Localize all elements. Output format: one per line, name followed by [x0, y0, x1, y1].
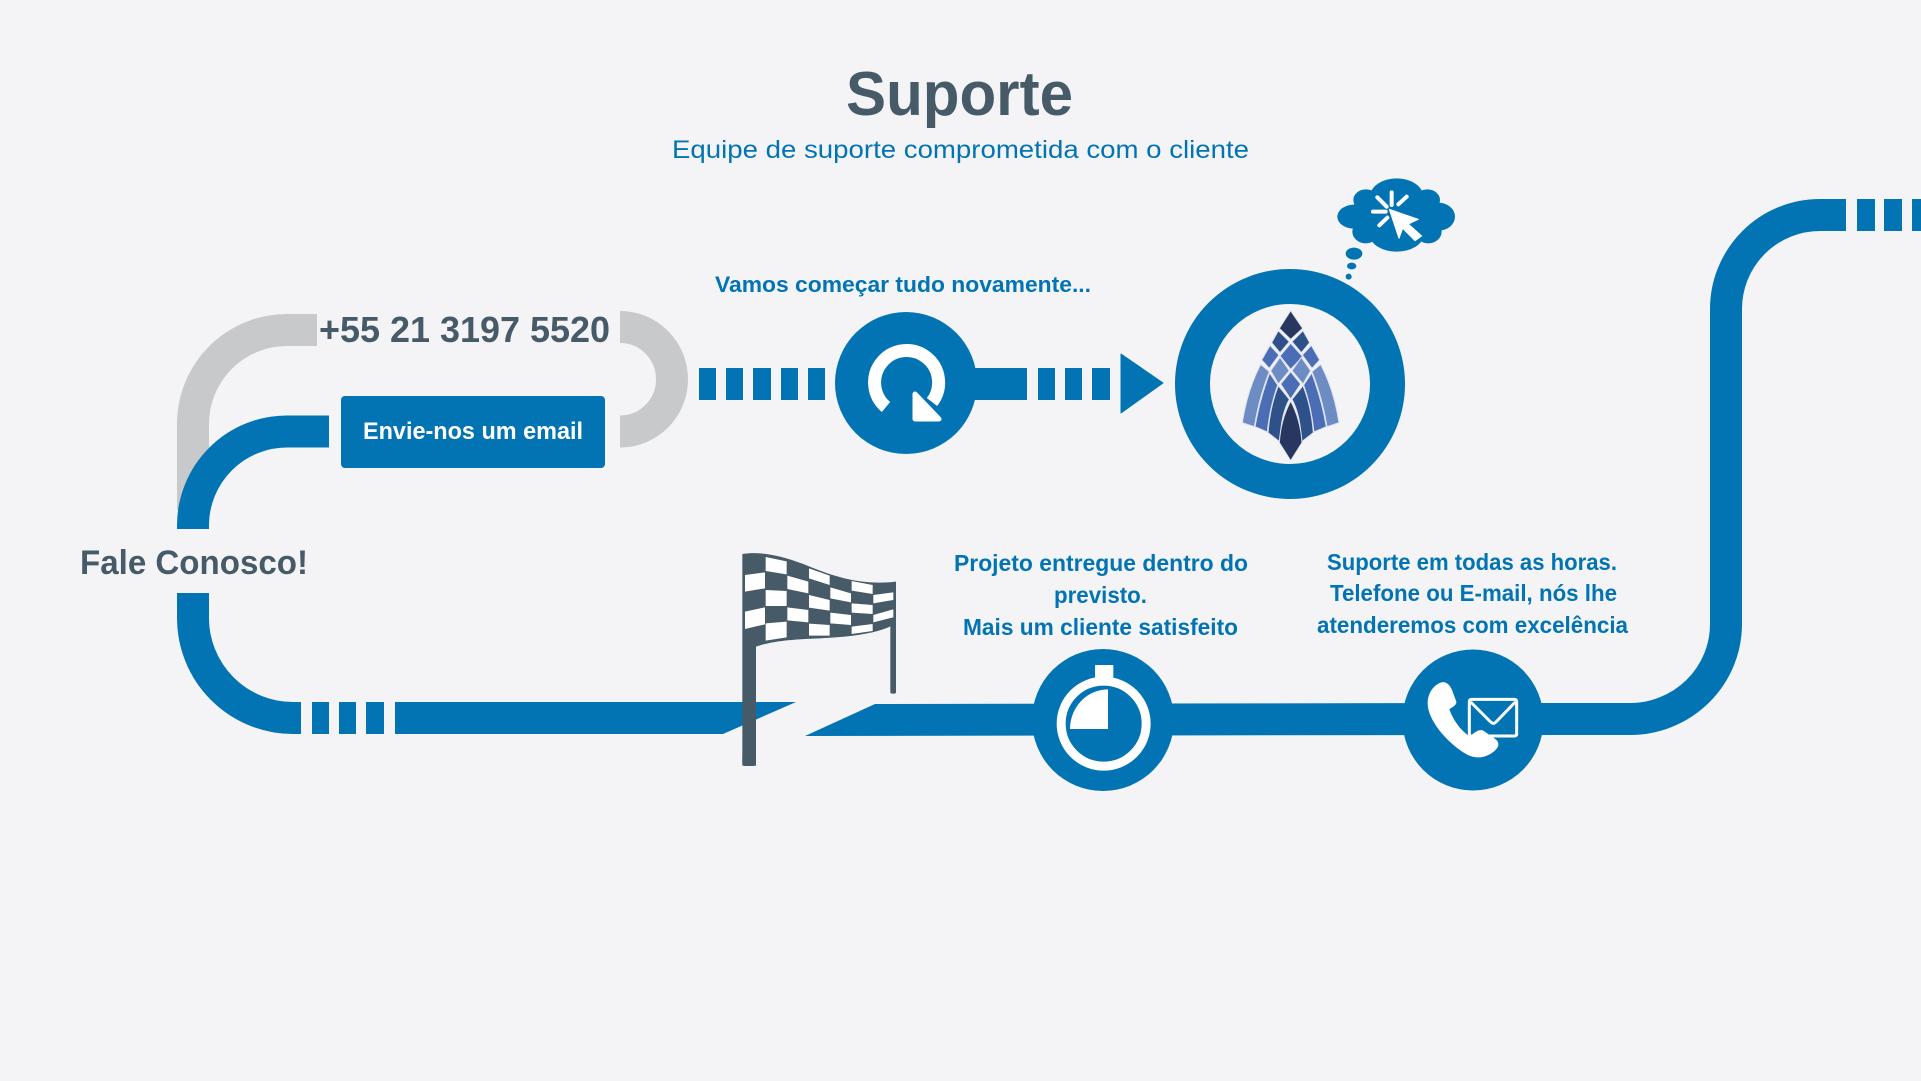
- icon: company logo: [1242, 311, 1339, 461]
- icon: phone and envelope: [1428, 682, 1517, 757]
- subtitle: Equipe de suporte comprometida com o cliente: [672, 136, 1249, 164]
- icon: thought cloud with cursor: [1337, 178, 1455, 280]
- timer node: [1032, 649, 1174, 791]
- restart node: [835, 312, 977, 454]
- delivery caption: [954, 550, 1248, 640]
- icon: restart arrow: [875, 351, 939, 419]
- blue track: lower left curve with dashes: [193, 593, 384, 734]
- arrow to logo: [970, 354, 1163, 413]
- phone number: +55 21 3197 5520: [319, 309, 610, 350]
- blue track: right S curve with dashes: [1530, 199, 1921, 719]
- icon: stopwatch: [1061, 665, 1146, 766]
- restart caption: Vamos começar tudo novamente...: [715, 272, 1091, 297]
- support caption: atenderemos com excelência: [1317, 612, 1628, 638]
- dashes before restart node: [699, 368, 825, 400]
- support caption: Telefone ou E-mail, nós lhe: [1330, 580, 1617, 606]
- grey track: upper left curve: [193, 330, 317, 510]
- blue track: segment before flag: [395, 702, 796, 734]
- delivery caption: previsto.: [1054, 582, 1147, 608]
- delivery caption: Mais um cliente satisfeito: [963, 614, 1238, 640]
- contact label: Fale Conosco!: [80, 544, 308, 582]
- title: Suporte: [846, 60, 1073, 129]
- logo ring: [1192, 286, 1388, 482]
- icon: checkered flag: [742, 553, 896, 766]
- delivery caption: Projeto entregue dentro do: [954, 550, 1248, 576]
- support caption: Suporte em todas as horas.: [1327, 549, 1617, 575]
- blue track: segment after flag to timer and phone nodes: [805, 703, 1480, 736]
- blue track: upper left curve: [193, 432, 329, 529]
- support caption: [1317, 549, 1628, 638]
- email button: [341, 396, 605, 468]
- grey track: right half loop: [620, 327, 672, 432]
- email button: Envie-nos um email: [363, 418, 583, 445]
- phone and email node: [1402, 650, 1544, 790]
